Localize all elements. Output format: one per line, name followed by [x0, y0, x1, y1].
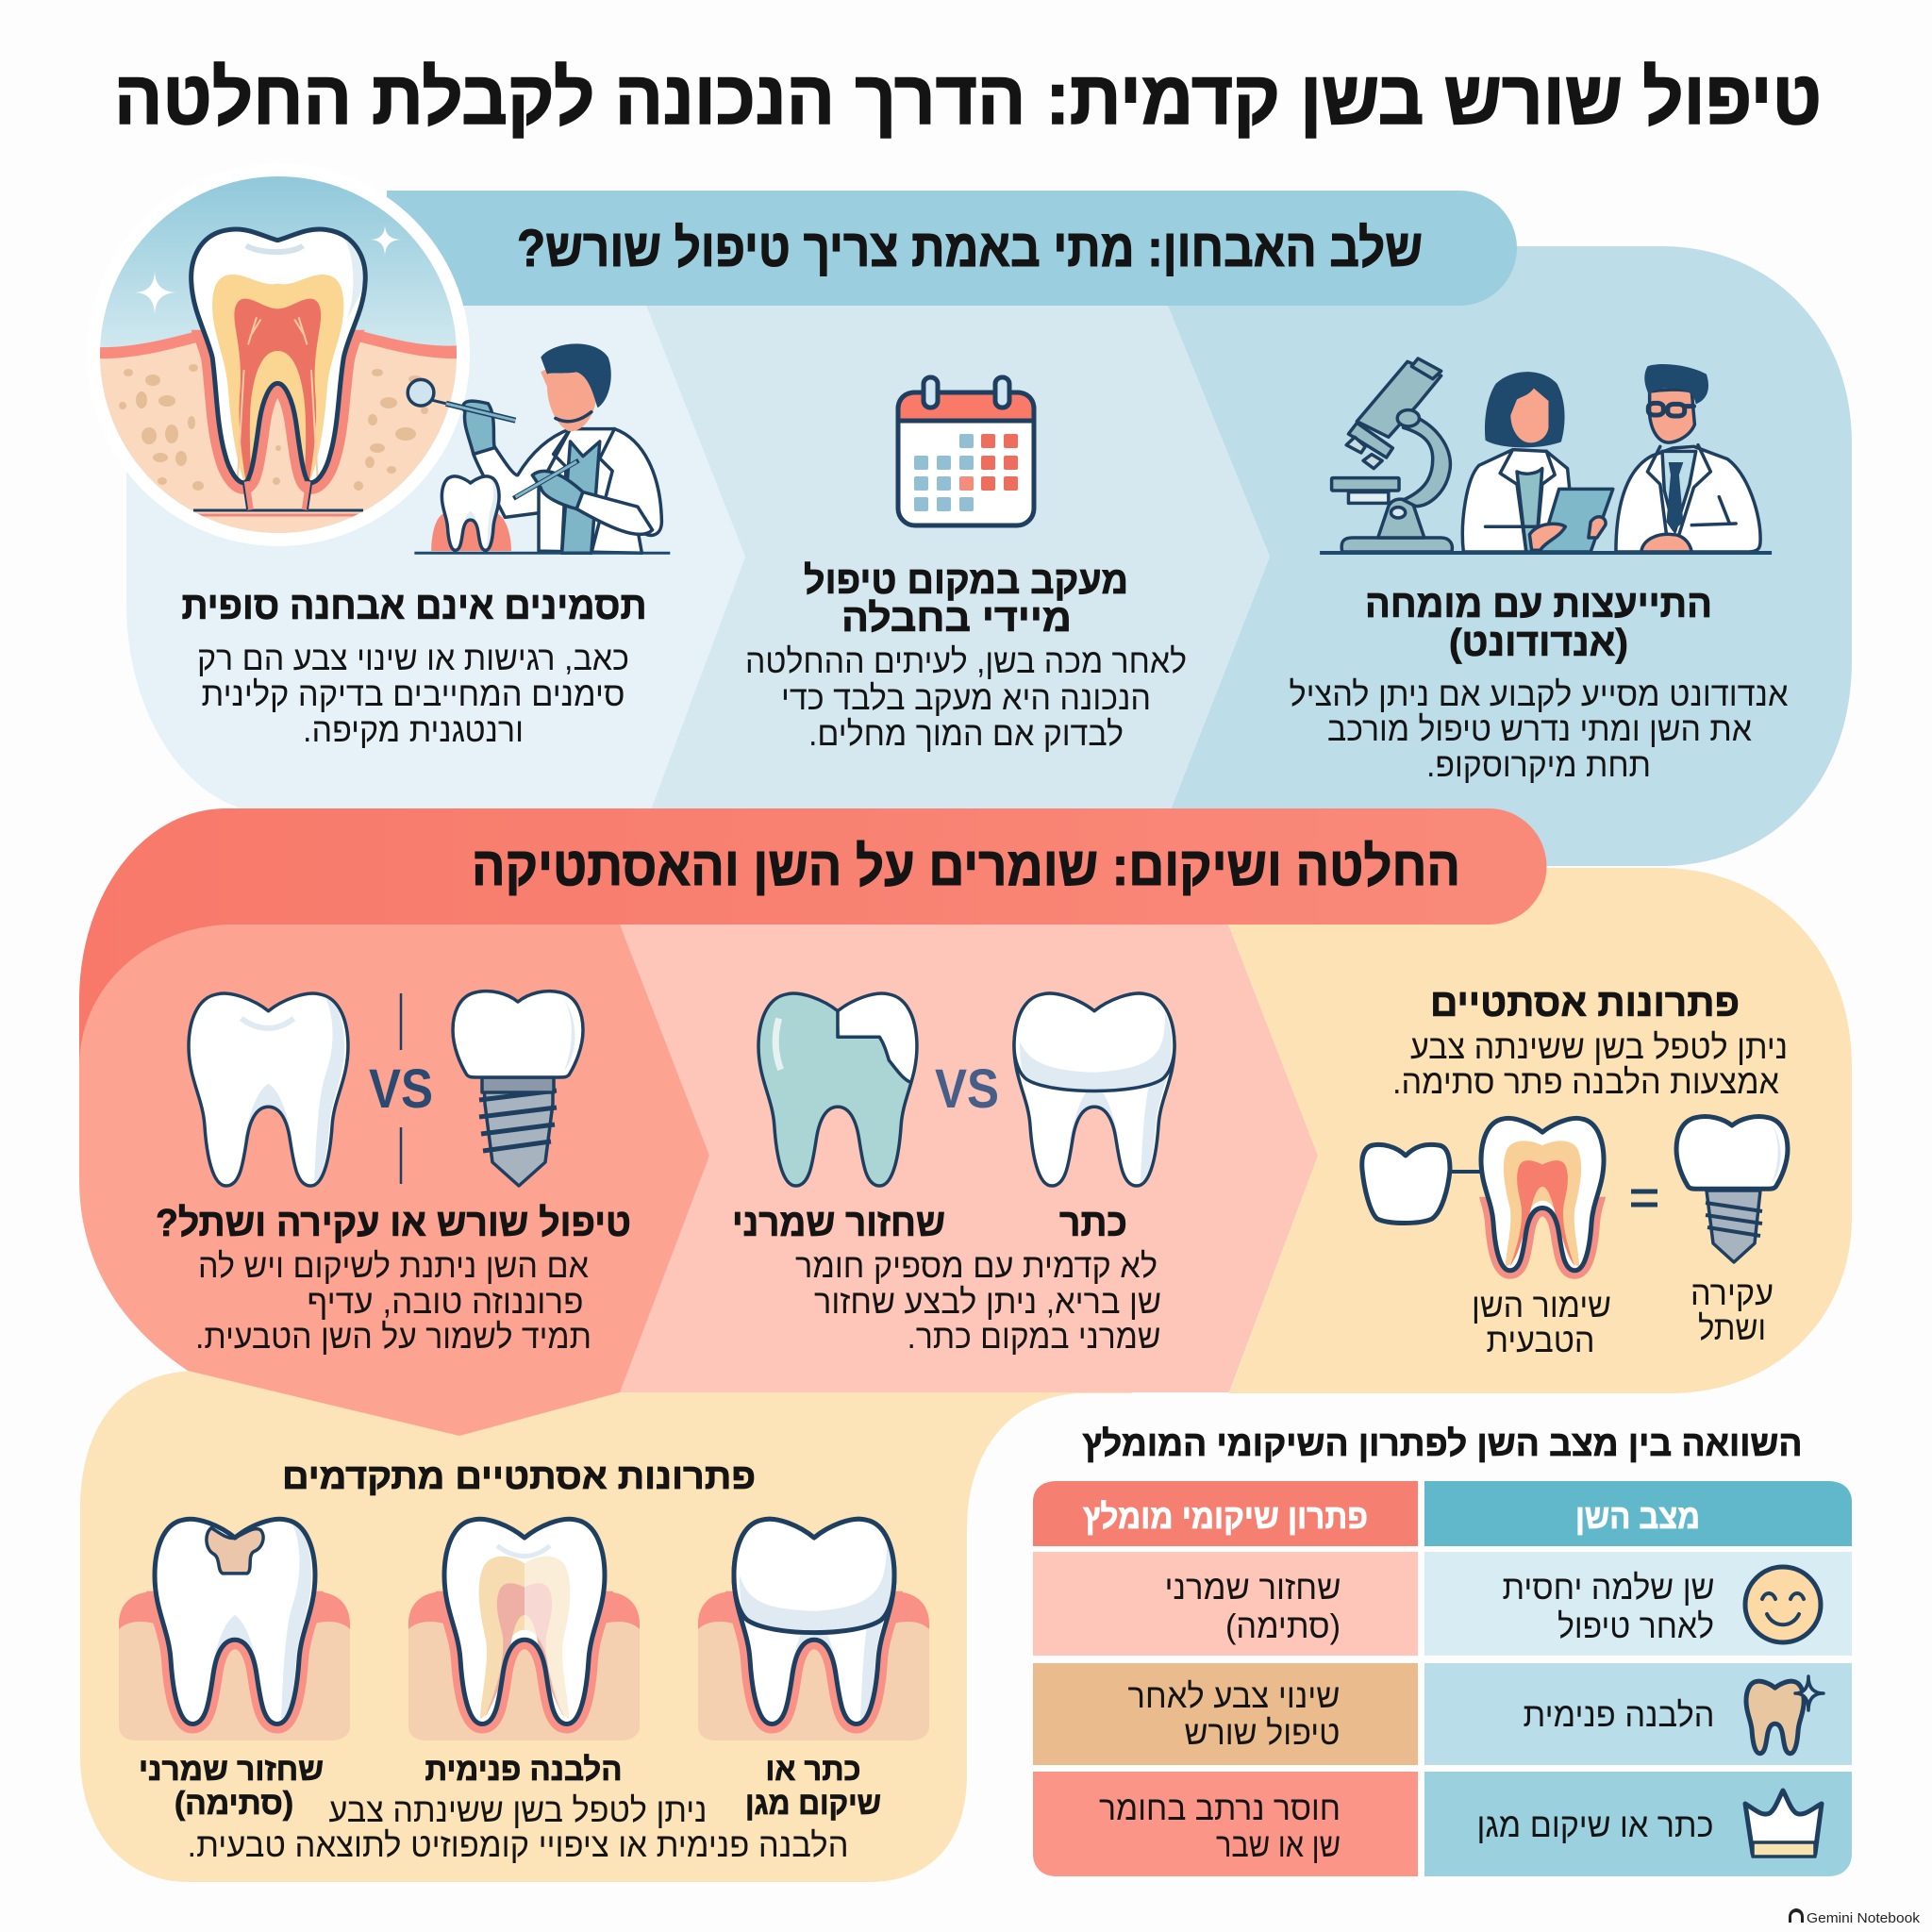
divider: vs: VS [369, 1058, 433, 1120]
label: natural tooth preservation [1472, 1286, 1611, 1359]
text block: crown vs restoration: שחזור שמרני [732, 1201, 945, 1244]
text block: specialist consultation: אנדודונט מסייע לקבוע אם ניתן להציל [1289, 675, 1789, 713]
text block: specialist consultation: את השן ומתי נדרש טיפול מורכב [1327, 709, 1752, 748]
table row 2 condition: הלבנה פנימית [1523, 1695, 1715, 1734]
text block: root canal vs implant: אם השן ניתנת לשיקום ויש לה [198, 1246, 589, 1285]
text block: specialist consultation: התייעצות עם מומחה [1365, 582, 1712, 625]
text block: aesthetic solutions: פתרונות אסתטיים [1430, 981, 1740, 1024]
illustration: dentist examining tooth [408, 343, 670, 553]
table header: restoration solution: פתרון שיקומי מומלץ [1083, 1497, 1368, 1536]
label: extraction and implant: עקירה [1690, 1274, 1774, 1312]
text block: crown vs restoration: כתר [1059, 1201, 1127, 1244]
label: conservative restoration [139, 1752, 324, 1822]
text block: root canal vs implant: טיפול שורש או עקירה ושתל? [156, 1201, 631, 1244]
panel: root canal vs implant background [79, 924, 709, 1436]
label: internal bleaching: הלבנה פנימית [425, 1752, 623, 1788]
panel: specialist consultation background [1132, 246, 1852, 866]
table row 3 solution: שן או שבר [1216, 1825, 1341, 1864]
label: extraction and implant [1690, 1274, 1774, 1347]
table header: tooth condition: מצב השן [1575, 1497, 1700, 1536]
icon: bridge crown and natural tooth [1362, 1118, 1604, 1271]
text block: symptoms [181, 584, 647, 749]
illustration: tooth cross-section in circle [87, 163, 472, 546]
panel: symptoms background [126, 306, 745, 809]
text block: root canal vs implant: תמיד לשמור על השן הטבעית. [195, 1317, 591, 1356]
heading: comparison table: השוואה בין מצב השן לפתרון השיקומי המומלץ [1083, 1424, 1802, 1464]
figure: male specialist with glasses [1616, 364, 1760, 552]
divider: vs: VS [935, 1058, 999, 1120]
text block: symptoms: כאב, רגישות או שינוי צבע הם רק [197, 639, 629, 677]
text block: crown vs restoration: שמרני במקום כתר. [908, 1317, 1160, 1356]
text block: aesthetic solutions [1392, 981, 1788, 1101]
panel: crown vs restoration background [604, 924, 1318, 1392]
label: crown or protective restoration: שיקום מגן [745, 1786, 881, 1822]
panel: monitoring background [646, 306, 1270, 809]
table row 1 solution: (סתימה) [1225, 1607, 1341, 1645]
text block: monitoring: מיידי בחבלה [841, 596, 1072, 640]
icon: microscope [1332, 358, 1452, 552]
text block: monitoring: לאחר מכה בשן, לעיתים ההחלטה [745, 641, 1187, 680]
icon: implant [1676, 1117, 1788, 1262]
text block: specialist consultation [1289, 582, 1789, 784]
text block: monitoring [745, 558, 1187, 753]
icon: equals sign [1631, 1191, 1657, 1205]
icon: dental implant [453, 991, 583, 1186]
text block: monitoring: הנכונה היא מעקב בלבד כדי [781, 678, 1151, 717]
text block: symptoms: ורנטגנית מקיפה. [303, 710, 524, 749]
table row 2 solution: שינוי צבע לאחר [1128, 1676, 1340, 1715]
panel: advanced aesthetic solutions [119, 1457, 929, 1864]
illustration: calendar icon [898, 377, 1034, 525]
table row 3 condition [1424, 1772, 1852, 1876]
label: conservative restoration: (סתימה) [175, 1786, 293, 1822]
text block: symptoms: סימנים המחייבים בדיקה קלינית [202, 675, 625, 713]
text block: advanced solutions description: הלבנה פנימית או ציפויי קומפוזיט לתוצאה טבעית. [187, 1825, 849, 1864]
section header bar: diagnosis [387, 191, 1517, 306]
text block: crown vs restoration: לא קדמית עם מספיק חומר [795, 1246, 1158, 1285]
heading: advanced aesthetic solutions: פתרונות אסתטיים מתקדמים [282, 1457, 756, 1497]
icon: natural tooth [189, 993, 348, 1186]
text block: crown vs restoration [732, 1201, 1161, 1356]
table row 3 condition: כתר או שיקום מגן [1477, 1806, 1713, 1844]
panel: comparison table [1033, 1424, 1852, 1876]
icon: tooth with restoration [758, 993, 917, 1186]
text block: specialist consultation: תחת מיקרוסקופ. [1426, 745, 1651, 784]
panel: diagnosis stage [87, 163, 1852, 866]
table row 2 solution [1033, 1663, 1418, 1765]
text block: advanced solutions description: ניתן לטפל בשן ששינתה צבע [328, 1790, 708, 1829]
panel: advanced aesthetic solutions background [80, 1371, 1132, 1882]
table row 1 condition [1424, 1552, 1852, 1656]
text block: monitoring: מעקב במקום טיפול [804, 558, 1128, 602]
label: conservative restoration: שחזור שמרני [139, 1752, 324, 1788]
table row 3 solution [1033, 1772, 1418, 1876]
title: טיפול שורש בשן קדמית: הדרך הנכונה לקבלת החלטה [114, 56, 1822, 140]
icon: crowned tooth in gum [698, 1519, 929, 1740]
watermark: Gemini Notebook: Gemini Notebook [1807, 1910, 1921, 1926]
label: crown or protective restoration: כתר או [766, 1752, 860, 1788]
text block: symptoms: תסמינים אינם אבחנה סופית [181, 584, 647, 627]
table row 2 solution: טיפול שורש [1185, 1713, 1340, 1752]
icon: tooth with crown [1014, 993, 1174, 1186]
table header: tooth condition [1424, 1481, 1852, 1546]
text block: advanced solutions description [187, 1790, 849, 1864]
text block: monitoring: לבדוק אם המוך מחלים. [808, 714, 1124, 753]
text block: aesthetic solutions: אמצעות הלבנה פתר סתימה. [1392, 1062, 1779, 1101]
table header: restoration solution [1033, 1481, 1418, 1546]
table row 1 solution: שחזור שמרני [1164, 1568, 1341, 1607]
section heading: diagnosis: שלב האבחון: מתי באמת צריך טיפול שורש? [517, 218, 1423, 277]
text block: specialist consultation: (אנדודונט) [1449, 621, 1628, 664]
panel: aesthetic solutions background [1228, 868, 1852, 1393]
table row 3 solution: חוסר נרתב בחומר [1099, 1789, 1341, 1827]
label: natural tooth preservation: שימור השן [1472, 1286, 1611, 1324]
figure: female specialist [1462, 372, 1613, 552]
table row 2 condition [1424, 1663, 1852, 1765]
text block: root canal vs implant: פרוננוזה טובה, עדיף [308, 1282, 583, 1321]
label: natural tooth preservation: הטבעית [1487, 1321, 1594, 1359]
illustration: specialists with microscope [1320, 358, 1772, 553]
text block: aesthetic solutions: ניתן לטפל בשן ששינתה צבע [1410, 1027, 1788, 1066]
panel: comparison table background [967, 1393, 1151, 1632]
label: extraction and implant: ושתל [1698, 1308, 1766, 1347]
section heading: decision and restoration: החלטה ושיקום: שומרים על השן והאסתטיקה [472, 836, 1460, 897]
icon: crown [1745, 1790, 1822, 1857]
icon: internally bleached tooth in gum [408, 1519, 640, 1740]
icon: tooth with filling in gum [119, 1519, 350, 1740]
icon: discolored tooth with sparkle [1746, 1676, 1824, 1754]
table row 1 condition: שן שלמה יחסית [1502, 1568, 1715, 1607]
panel: decision and restoration stage [79, 808, 1852, 1436]
text block: root canal vs implant [156, 1201, 631, 1356]
icon: smiling face [1745, 1567, 1821, 1642]
table row 1 solution [1033, 1552, 1418, 1656]
label: crown or protective restoration [745, 1752, 881, 1822]
text block: crown vs restoration: שן בריא, ניתן לבצע שחזור [814, 1282, 1161, 1321]
section header bar: decision and restoration [79, 808, 1546, 1113]
table row 1 condition: לאחר טיפול [1557, 1607, 1714, 1645]
